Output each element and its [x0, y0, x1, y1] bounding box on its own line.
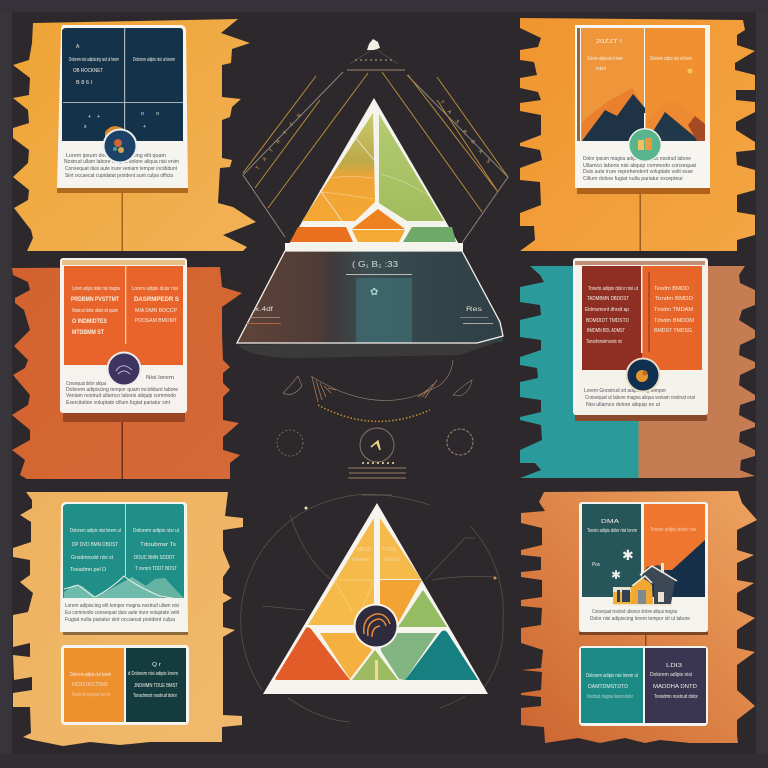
panel: middle right teal and clay	[520, 258, 755, 478]
card: bottom left upper: Dolorem adipis nisi ut	[133, 528, 180, 534]
card: middle right: BDMDIDT TMDSTD	[586, 318, 629, 324]
segment: bottom right	[403, 227, 456, 242]
card: bottom left lower: d Dolorem nisi adipis lorem	[128, 671, 178, 677]
card: middle right: BMDMN BDL ADMST	[587, 328, 625, 334]
label: faint pyramid text: MESE	[357, 547, 372, 553]
card: top left: o o	[141, 111, 159, 117]
icon: snowflake stars: ✱	[622, 547, 634, 563]
diagram: upper pyramid line frame	[243, 39, 508, 243]
card: bottom right lower: MADDHA DNTD	[653, 684, 697, 690]
card: bottom left upper: DP DVD BMN DBDST	[72, 542, 118, 548]
label: left note	[246, 307, 281, 324]
card: top left: x	[84, 124, 87, 130]
segment: upper right	[380, 518, 421, 579]
card: top left: Nostrud ullam labore magna dolore aliqua nisi enim	[64, 159, 179, 165]
icon: right small ring	[447, 429, 473, 455]
card: top left: Lorem ipsum dolor sit adipiscing elit quam	[66, 153, 166, 159]
card: bottom right lower: Tonsdmn nostrud dolor	[654, 694, 698, 700]
card: middle right	[573, 258, 708, 421]
segment: right teal	[405, 630, 478, 680]
label: right note: Res	[466, 307, 482, 313]
card: bottom right upper	[579, 502, 708, 635]
icon: snowflake stars	[611, 547, 634, 582]
label: faint pyramid text: TDSA	[382, 547, 397, 553]
card: middle right: Consequat ut labore magna aliqua veniam nostrud erat	[585, 395, 696, 401]
card: bottom right upper: Dolor nisi adipiscing lorem tempor sit ut labore	[590, 616, 690, 622]
card: top right: Dolor ipsum magna adipiscing quis nostrud labore	[583, 156, 691, 162]
card: middle right: Nisi ullamco dolore aliquip ex ut	[586, 402, 661, 408]
label: rotated left rail text: T X T R T F N	[255, 112, 303, 171]
chart: lower glass pyramid	[237, 243, 503, 358]
panel: bottom right copper	[521, 491, 757, 743]
card: top left: A	[76, 44, 80, 50]
card: middle right: Toneto adipis dolor nisi ut	[588, 286, 639, 292]
label: faint pyramid text	[352, 547, 400, 563]
card: middle right: Eldmsmont dhrsit ap	[585, 307, 629, 313]
card: bottom right upper: Consequat nostrud ullamco dolore aliqua magna	[592, 609, 677, 615]
card: middle right: Tondm BMDD	[655, 296, 693, 302]
segment: right green	[379, 114, 444, 221]
card: bottom left lower: Nostrud magna lorem	[72, 692, 110, 698]
card: top right: Duis aute irure reprehenderit voluptate velit esse	[583, 169, 693, 175]
card: top left	[57, 25, 188, 193]
panel: top left amber	[13, 19, 256, 251]
card: middle right: Lorem Gnostrud sit adipiscing tempor	[584, 388, 666, 394]
label: faint pyramid text: nisi	[384, 557, 400, 563]
chart: upper pyramid	[285, 98, 463, 251]
card: bottom left lower: Tonsdmnst nostrud dolor	[133, 693, 177, 699]
label: pyramid caption: ( G₁ B₂ :33	[352, 260, 399, 269]
segment: inner orange	[320, 633, 372, 679]
panel: top right orange	[520, 18, 755, 251]
card: middle left: MTDBMM ST	[72, 329, 104, 336]
segment: left red	[275, 627, 350, 680]
card: top left: Consequat duis aute irure veniam tempor incididunt	[65, 166, 178, 172]
card: bottom left upper: Tdoubmsr Ts	[140, 542, 177, 548]
card: bottom right lower: DAMTDMSTDTD	[588, 684, 628, 690]
card: top right: Dolorem adipis nisi ut lorem	[650, 56, 692, 62]
card: top right: Ullamco laboris nisi aliquip commodo consequat	[583, 163, 697, 169]
label: faint pyramid text: lorem	[352, 557, 370, 563]
card: bottom left lower: FKDDI DDCTDMD	[72, 682, 108, 688]
card: bottom right lower: LDI3	[666, 663, 682, 669]
card: middle right: Tdsdm BMDDM	[654, 318, 694, 324]
card: bottom left upper: Ea commodo consequat duis aute irure voluptate velit	[65, 610, 180, 616]
card: middle left: Nostrud dolor ullam sit quam	[72, 308, 118, 314]
card: middle left: Exercitation voluptate cillum fugiat pariatur sint	[66, 400, 171, 406]
card: bottom right upper: Toneto adipis dolor nisi lorem	[587, 528, 637, 534]
card: middle left: Lorem adipis dolor nisi	[132, 286, 178, 292]
card: middle left: MIA DMN BDCCP	[135, 308, 178, 314]
card: middle left: Consequat dolor aliqua	[66, 381, 106, 387]
card: top left: +	[143, 124, 146, 130]
card: bottom right lower: Dolorem adipis nisi	[650, 672, 692, 678]
icon: left small ring	[277, 430, 303, 456]
label: rotated right rail text: T A S K S A S	[438, 100, 492, 165]
segment: centre orange	[352, 209, 405, 229]
icon: navy badge	[102, 128, 138, 164]
card: middle left: O INDMIDTES	[72, 318, 108, 325]
card: middle left: Lorem adipis dolor nisi magna	[72, 286, 120, 292]
decoration: hanging arcs and dots	[283, 360, 472, 421]
card: middle right: Tesdm BMDD	[654, 286, 689, 292]
card: bottom right upper: Pos	[592, 562, 600, 568]
card: middle left: Veniam nostrud ullamco laboris aliquip commodo	[66, 393, 176, 399]
label: left note: x.4df	[255, 307, 273, 313]
card: top left: OB ROCKNET	[73, 68, 103, 74]
card: top right: nisi	[596, 66, 606, 72]
icon: snowflake stars: ✱	[611, 568, 621, 582]
card: bottom left upper: Fugiat nulla pariatur sint occaecat proident culpa	[65, 617, 175, 623]
card: top right: Dolorem adipis nisi ut lorem	[587, 56, 623, 62]
icon: violet badge	[106, 352, 142, 386]
card: middle left: PRDBMN PVSTTMT	[71, 296, 119, 303]
card: bottom right upper: Toneto adipis dolor nisi	[650, 527, 696, 533]
icon: lower pyramid badge	[354, 604, 398, 648]
card: bottom left lower	[61, 645, 189, 725]
card: bottom left upper: Dolorem adipis nisi lorem ut	[70, 528, 121, 534]
card: bottom right lower: Nostrud magna lorem dolor	[587, 694, 633, 700]
card: top left: Sint occaecat cupidatat proident sunt culpa officia	[65, 173, 173, 179]
card: bottom left lower: JNDMMN TDUE BMST	[134, 683, 178, 689]
card: middle right: Tonsdmnstrnostis mi	[586, 339, 622, 345]
decoration: large orbit around lower pyramid	[241, 494, 503, 722]
card: top left: + +	[88, 114, 100, 120]
card: middle left: DASRMPEDR S	[134, 296, 180, 303]
card: bottom left upper: Toeadmn pel D	[70, 567, 106, 573]
card: middle left: PDOSAM BMOMT	[135, 318, 177, 324]
card: top left: Dolorem nisi adipiscing sed ut lorem	[69, 57, 119, 63]
card: bottom left upper: DDUC BMN SDDDT	[134, 555, 175, 561]
icon: teal glyph: ✿	[370, 287, 378, 298]
icon: green badge	[628, 113, 662, 162]
icon: pyramid cap mark	[355, 39, 395, 60]
card: bottom left upper: Lorem adipiscing elit tempor magna nostrud ullam nisi	[65, 603, 179, 609]
card: middle left: Nisi lorem	[146, 375, 174, 381]
card: top left: Dolorem adipis nisi ut lorem	[133, 57, 175, 63]
label: right note	[460, 307, 493, 324]
chart: lower pyramid	[263, 503, 488, 694]
icon: house	[613, 563, 677, 606]
segment: bottom left	[290, 227, 353, 242]
card: bottom right upper: DMA	[601, 519, 620, 525]
card: middle right: Tnsdm TMDAM	[654, 307, 693, 313]
card: middle left	[60, 258, 187, 422]
card: top right: Cillum dolore fugiat nulla pariatur excepteur	[583, 176, 683, 182]
icon: navy and amber badge	[626, 358, 660, 392]
segment: sage	[380, 633, 437, 680]
card: middle right: BMDST TMDSG	[654, 328, 692, 334]
card: bottom right lower	[579, 646, 708, 726]
panel: middle left rust	[12, 258, 242, 479]
card: top left: B 8 6 I	[76, 80, 92, 86]
segment: upper left gradient	[302, 113, 375, 221]
segment: right green	[398, 590, 447, 627]
card: top right: 20ZZT I	[596, 39, 622, 45]
icon: centre bulb ring	[348, 428, 406, 478]
card: bottom right lower: Dolorem adipis nisi lorem ut	[586, 673, 639, 679]
segment: mid right	[380, 580, 422, 623]
card: bottom left upper	[60, 502, 188, 635]
segment: bottom green	[352, 650, 398, 680]
card: bottom left upper: Gnsdmnsdd nisi st	[71, 555, 114, 561]
card: bottom left lower: Dolorem adipis nisi lorem	[70, 672, 111, 678]
card: middle left: Dolorem adipiscing tempor quam incididunt labore	[66, 387, 178, 393]
card: top right	[575, 25, 710, 194]
panel: bottom left sand	[13, 492, 243, 746]
card: bottom left lower: Q r	[152, 662, 161, 668]
segment: left column	[308, 518, 374, 625]
card: middle right: TADMBMN DBDDST	[587, 296, 629, 302]
card: bottom left upper: T xsmnt TDDT BDST	[135, 566, 177, 572]
